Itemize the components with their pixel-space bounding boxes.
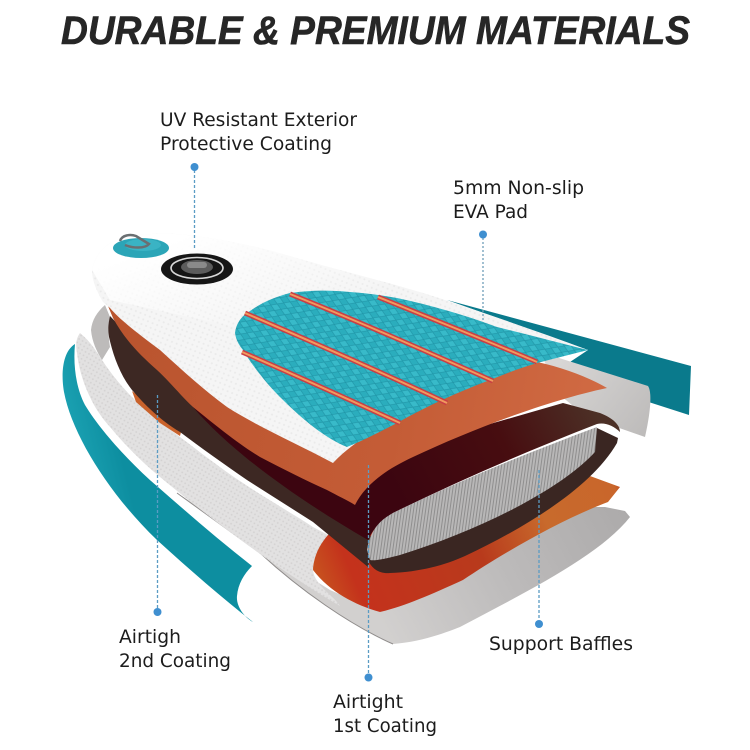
- layer: small orange piece: [132, 391, 182, 436]
- stripe 3: [245, 313, 447, 403]
- label: UV resistant exterior: UV Resistant Exterior: [160, 110, 357, 131]
- callout line: 2nd coating: [154, 395, 162, 616]
- exploded board layers: [63, 234, 691, 644]
- label: UV resistant exterior: [160, 110, 357, 155]
- layer: brown side wall: [108, 316, 374, 567]
- stripe centres: [242, 294, 537, 423]
- valve handle: [187, 262, 207, 268]
- callout line: 1st coating: [364, 465, 372, 682]
- stripe 1: [378, 297, 537, 362]
- valve cap: [181, 260, 213, 274]
- label: airtight 2nd coating: Airtigh: [119, 627, 181, 648]
- label: support baffles: Support Baffles: [489, 634, 633, 655]
- label: airtight 2nd coating: [119, 627, 231, 672]
- layer: top board highlight: [92, 234, 445, 330]
- valve rings: [171, 258, 223, 278]
- label: airtight 2nd coating: 2nd Coating: [119, 651, 231, 672]
- D-ring base: [113, 238, 169, 258]
- stripe 4: [242, 352, 400, 423]
- D-ring inner: [125, 239, 161, 251]
- callout line: EVA pad: [479, 230, 487, 320]
- layer: maroon core top: [193, 403, 620, 540]
- label: UV resistant exterior: Protective Coating: [160, 134, 332, 155]
- label: airtight 1st coating: 1st Coating: [333, 716, 437, 737]
- layer: red fabric: [313, 476, 620, 612]
- D-ring loop: [120, 235, 149, 248]
- label: EVA pad: [453, 178, 584, 223]
- layer: grey back sheet right: [540, 352, 650, 437]
- layer: orange coating: [108, 306, 607, 505]
- title: DURABLE & PREMIUM MATERIALS: [61, 9, 690, 53]
- layer: bottom sheet edge line: [177, 493, 393, 644]
- teal traction pad: [235, 291, 588, 447]
- traction pad stripes: [242, 294, 537, 423]
- layer: top board deck: [92, 234, 588, 463]
- layer: brown core bottom: [366, 428, 618, 573]
- layer: bottom sheet: [177, 493, 630, 644]
- layer: white side strip: [76, 333, 340, 606]
- stripe 2: [290, 294, 493, 381]
- callout line: baffles: [535, 470, 543, 628]
- icon: D-ring: [113, 235, 169, 258]
- valve outer ring: [161, 254, 233, 284]
- label: airtight 1st coating: Airtight: [333, 692, 403, 713]
- layer: teal rail left: [63, 344, 253, 622]
- layer: teal rail right: [447, 300, 691, 415]
- label: airtight 1st coating: [333, 692, 437, 737]
- icon: air valve: [161, 254, 233, 284]
- label: EVA pad: 5mm Non-slip: [453, 178, 584, 199]
- label: EVA pad: EVA Pad: [453, 202, 528, 223]
- callout line: UV coating: [190, 163, 198, 250]
- layer: grey baffles: [367, 427, 597, 560]
- layer: grey inner fold: [91, 305, 110, 360]
